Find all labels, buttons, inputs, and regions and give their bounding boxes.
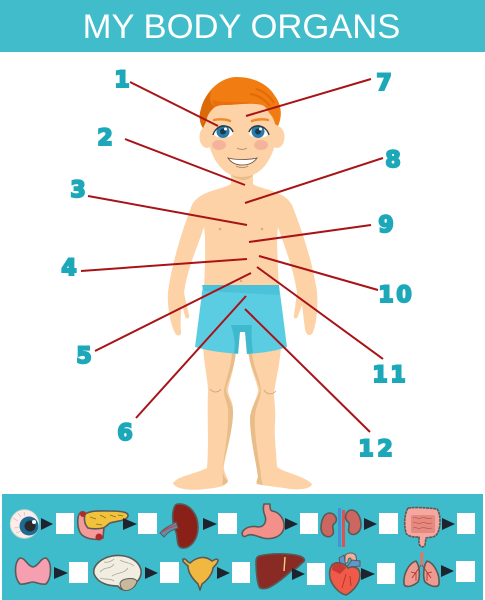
icon: kidneys [321, 508, 361, 547]
icon: liver [256, 554, 304, 589]
head [200, 77, 284, 177]
number labels: 2 [97, 126, 113, 151]
number labels: 9 [378, 213, 394, 238]
number labels: 10 [378, 283, 412, 308]
pointer lines [81, 79, 383, 432]
neck shadow [228, 172, 255, 180]
icon: heart [330, 553, 360, 595]
eyebrows [214, 119, 268, 121]
number labels [61, 68, 412, 462]
number labels: 3 [70, 178, 86, 203]
legs [173, 345, 312, 490]
number labels: 7 [376, 71, 392, 96]
number labels: 12 [358, 437, 393, 462]
icon: lungs [404, 552, 439, 586]
number labels: 5 [76, 344, 92, 369]
torso and arms [168, 168, 317, 335]
shorts [195, 285, 287, 355]
header banner [0, 0, 485, 52]
boy figure [168, 77, 317, 490]
icon: brain [94, 556, 141, 591]
number labels: 1 [114, 68, 130, 93]
nose and mouth [228, 148, 257, 168]
organ panel [2, 494, 483, 600]
number labels: 6 [117, 421, 133, 446]
icon: stomach [242, 504, 284, 539]
answer boxes [56, 513, 475, 585]
number labels: 4 [61, 256, 77, 281]
title: MY BODY ORGANS [83, 8, 400, 46]
icon: eye [10, 510, 39, 538]
icon: pancreas [78, 511, 128, 540]
icon: thyroid [16, 558, 50, 584]
eyes [213, 125, 269, 138]
hair [200, 77, 281, 128]
number labels: 8 [385, 148, 401, 173]
number labels: 11 [372, 363, 406, 388]
icon: bladder [183, 557, 218, 590]
icon: intestines [405, 508, 440, 547]
cheeks [212, 140, 226, 150]
arrows [41, 518, 455, 580]
chest details [219, 228, 263, 282]
icon: spleen [160, 504, 198, 548]
